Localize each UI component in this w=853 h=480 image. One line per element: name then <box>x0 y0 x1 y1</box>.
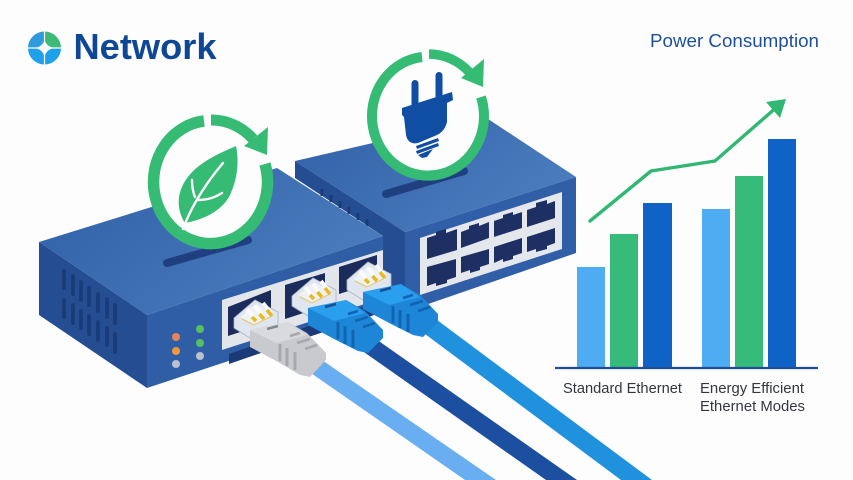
cable: light blue <box>308 358 496 480</box>
cable: bright blue <box>421 317 652 480</box>
cable: dark blue <box>361 337 577 480</box>
switch slot <box>167 240 248 263</box>
switch top face <box>295 117 576 232</box>
icon: network logo <box>28 32 61 64</box>
switch top face <box>39 168 383 315</box>
ring interior <box>152 120 266 244</box>
side vents <box>64 271 115 352</box>
plug <box>402 72 453 158</box>
heading: Network: Network <box>74 26 217 67</box>
icon: plug in recycling ring <box>370 54 484 176</box>
ring arc <box>372 57 484 176</box>
bar chart: power consumption <box>555 99 818 415</box>
switch ports <box>427 200 555 286</box>
group: Energy Efficient bars <box>702 139 796 367</box>
label: Energy Efficient Ethernet Modes: Energy Efficient <box>700 380 805 397</box>
switch slot <box>386 171 464 194</box>
ring arrow <box>429 54 470 73</box>
cables <box>308 317 652 480</box>
logo: Network <box>28 26 217 67</box>
connector: right blue <box>347 262 438 337</box>
connector: middle blue <box>292 278 383 353</box>
label: Energy Efficient Ethernet Modes: Ethernet Modes <box>700 398 805 415</box>
label: Standard Ethernet: Standard Ethernet <box>563 380 683 397</box>
connector: grey <box>234 300 326 377</box>
switch side face <box>39 242 147 388</box>
left network switch <box>39 168 383 388</box>
right network switch <box>295 117 576 312</box>
switch side face <box>295 161 405 312</box>
status lights <box>172 325 204 368</box>
ring interior <box>370 57 482 176</box>
ring arc <box>154 121 268 244</box>
leaf veins <box>183 163 223 229</box>
group: Standard Ethernet bars <box>577 203 672 367</box>
switch port plate <box>420 192 562 295</box>
heading: Power Consumption: Power Consumption <box>650 30 819 51</box>
switch front face <box>405 177 576 312</box>
switch front face <box>147 236 383 388</box>
axis <box>555 367 818 369</box>
vent ticks <box>322 189 367 226</box>
trend arrow <box>590 99 786 221</box>
ring arrow <box>211 120 253 139</box>
front lower shadow <box>229 300 383 364</box>
icon: leaf in recycling ring <box>152 120 268 244</box>
port plate <box>222 250 383 350</box>
leaf <box>179 146 238 223</box>
dark port openings <box>228 255 377 336</box>
